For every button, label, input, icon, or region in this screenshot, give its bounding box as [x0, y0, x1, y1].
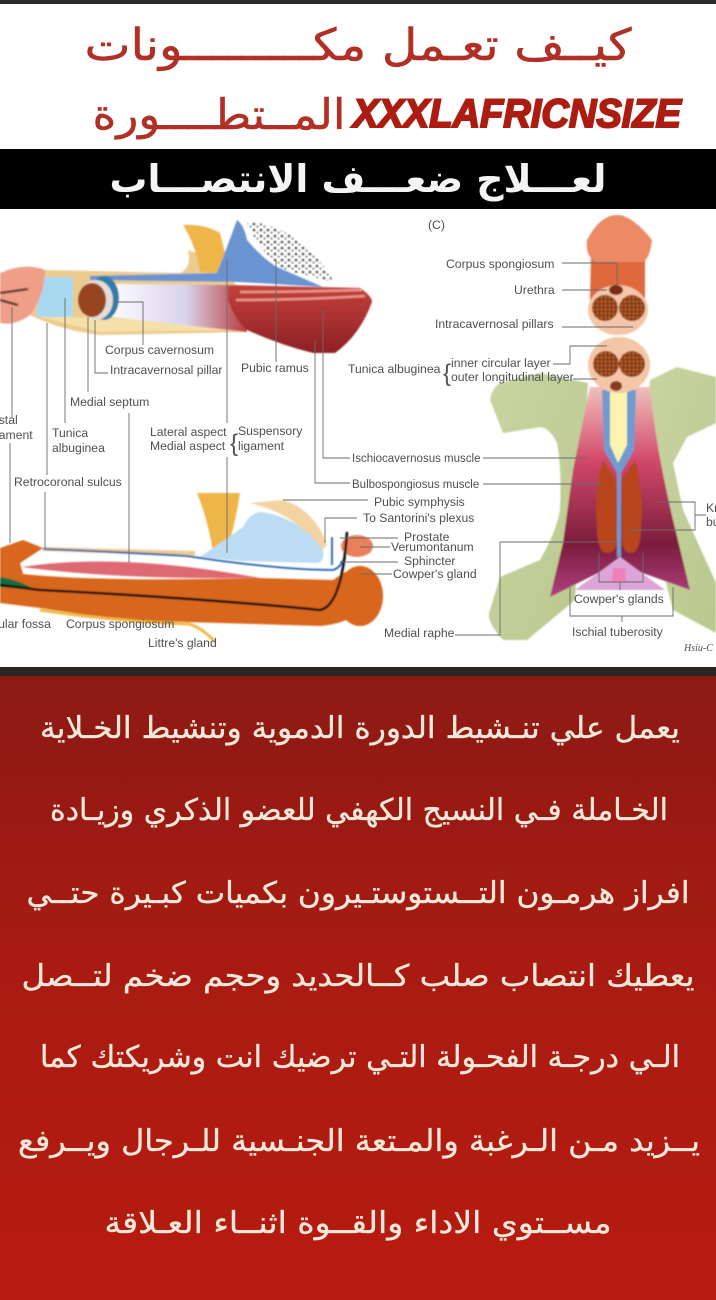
- vein: [43, 537, 343, 570]
- fossa: [0, 577, 35, 590]
- line 5: الـي درجـة الفحـولة التـي ترضيك انت وشريكتك كما: [40, 1040, 680, 1075]
- pink center: [612, 568, 626, 582]
- bulb left: [596, 460, 617, 553]
- label group right: Intracavernosal pillars: [435, 317, 554, 331]
- glans: [587, 215, 652, 262]
- bracket glyphs: [230, 360, 451, 457]
- label group left: Medial septum: [70, 395, 149, 409]
- lower orange lobe: [337, 566, 383, 626]
- label group right: Pubic symphysis: [374, 495, 465, 509]
- blue channels: [602, 390, 636, 557]
- label group right: Tunica albuginea: [348, 362, 441, 376]
- central muscle mass: [550, 387, 690, 597]
- shaft tube: [112, 284, 247, 332]
- yellow channel: [610, 390, 627, 463]
- label group left: Medial aspect: [150, 439, 226, 453]
- upper section circle: [588, 285, 648, 335]
- label group left: Corpus cavernosum: [105, 343, 214, 357]
- bladder shape: [200, 512, 323, 563]
- bulb right: [622, 460, 642, 553]
- label group right: Ischial tuberosity: [572, 625, 664, 639]
- label group right: Bulbospongiosus muscle: [352, 479, 479, 491]
- lower urethra: [610, 381, 622, 391]
- brand name: XXXLAFRICNSIZE: [351, 92, 682, 136]
- signature: Hsiu-C: [683, 643, 713, 654]
- upper tan edge: [43, 547, 195, 556]
- anatomy diagram: lower sagittal view: [0, 493, 383, 642]
- label group right: inner circular layer: [451, 356, 551, 370]
- label group left: Lateral aspect: [150, 425, 227, 439]
- subtitle banner: [0, 149, 716, 209]
- fat pad: [183, 225, 230, 273]
- label group right: outer longitudinal layer: [451, 370, 574, 384]
- description text: [18, 711, 700, 1241]
- label group right: Prostate: [404, 530, 450, 544]
- lilac lower triangle: [575, 557, 665, 590]
- suspensory brace: {: [230, 430, 238, 457]
- tube end: [89, 276, 119, 320]
- line 2: الخـاملة فـي النسيج الكهفي للعضو الذكري وزيـادة: [50, 793, 668, 828]
- title line 2 arabic: المــتطــــورة: [92, 90, 346, 139]
- label group right: To Santorini's plexus: [363, 511, 474, 525]
- anatomy diagram: upper lateral view: [0, 220, 372, 353]
- line 3: افراز هرمـون التــستوستـيرون بكميات كبـيرة حتــي: [26, 876, 690, 911]
- dotted bone region: [247, 222, 334, 282]
- top dark strip: [0, 0, 716, 4]
- line 4: يعطيك انتصاب صلب كــالحديد وحجم ضخم لتــصل: [22, 959, 694, 994]
- orange tip: [0, 540, 43, 574]
- corpus section: [79, 280, 113, 320]
- tail: [40, 610, 215, 642]
- diagram leader lines: [10, 260, 706, 635]
- line 7: مســتوي الاداء والقــوة اثنــاء العـلاقة: [104, 1206, 612, 1241]
- label group left: albuginea: [52, 441, 105, 455]
- label group right: Cowper's glands: [574, 592, 664, 606]
- line 6: يــزيد مـن الـرغبة والمـتعة الجنـسية للـرجال ويــرفع: [18, 1124, 700, 1159]
- glans: [0, 267, 45, 324]
- spongy section: [78, 283, 106, 317]
- pale fat strip: [36, 316, 245, 332]
- urethra ring: [609, 285, 623, 295]
- fat pad: [197, 493, 240, 552]
- lower section spongy right: [619, 351, 645, 377]
- label group right: Medial raphe: [384, 626, 455, 640]
- green pelvic bone right: [640, 367, 716, 633]
- label group left: ligament: [238, 439, 285, 453]
- line 1: يعمل علي تنـشيط الدورة الدموية وتنشيط الخـلاية: [40, 711, 680, 746]
- pink tissue: [22, 562, 260, 578]
- label group left: Corpus spongiosum: [66, 617, 174, 631]
- urethra: [0, 532, 347, 610]
- diagram labels: [0, 218, 716, 654]
- front tube: [37, 277, 73, 317]
- label group left: Pubic ramus: [241, 361, 309, 375]
- shaft: [590, 255, 645, 300]
- dark separator: [0, 667, 716, 676]
- label group left: Tunica: [52, 426, 88, 440]
- label group left: Littre's gland: [148, 636, 217, 650]
- outer orange band: [0, 570, 370, 626]
- lower section circle: [588, 337, 650, 393]
- label group right: Verumontanum: [391, 540, 474, 554]
- prostate lobe: [341, 535, 373, 557]
- subtitle banner: لعـــلاج ضعـــف الانتصـــاب: [110, 157, 606, 201]
- label group right: Corpus spongiosum: [446, 257, 554, 271]
- blue ligament: [90, 220, 323, 287]
- label group right: Sphincter: [404, 554, 456, 568]
- upper section spongy left: [592, 295, 618, 321]
- header: title lines: [84, 20, 682, 139]
- muscle highlight: [236, 290, 365, 300]
- label group right: Ischiocavernosus muscle: [352, 453, 480, 465]
- muscle: [228, 285, 372, 353]
- label group left: Retrocoronal sulcus: [14, 475, 122, 489]
- label group left: Intracavernosal pillar: [110, 363, 222, 377]
- anatomy diagram: frontal view: [489, 215, 716, 640]
- tan halo: [250, 500, 327, 552]
- title line 1: كيــف تعـمل مكـــــــــونات: [84, 20, 632, 71]
- label (C): (C): [428, 218, 445, 232]
- upper section spongy right: [619, 295, 645, 321]
- green pelvic bone left: [489, 373, 588, 640]
- label group right: Urethra: [514, 283, 555, 297]
- label group left: Suspensory: [238, 424, 303, 438]
- red description panel: [0, 676, 716, 1300]
- lower section spongy left: [593, 351, 619, 377]
- sheath: [30, 250, 247, 335]
- tunica brace: {: [443, 360, 451, 387]
- glans slit: [0, 289, 28, 305]
- label group right: Cowper's gland: [393, 567, 477, 581]
